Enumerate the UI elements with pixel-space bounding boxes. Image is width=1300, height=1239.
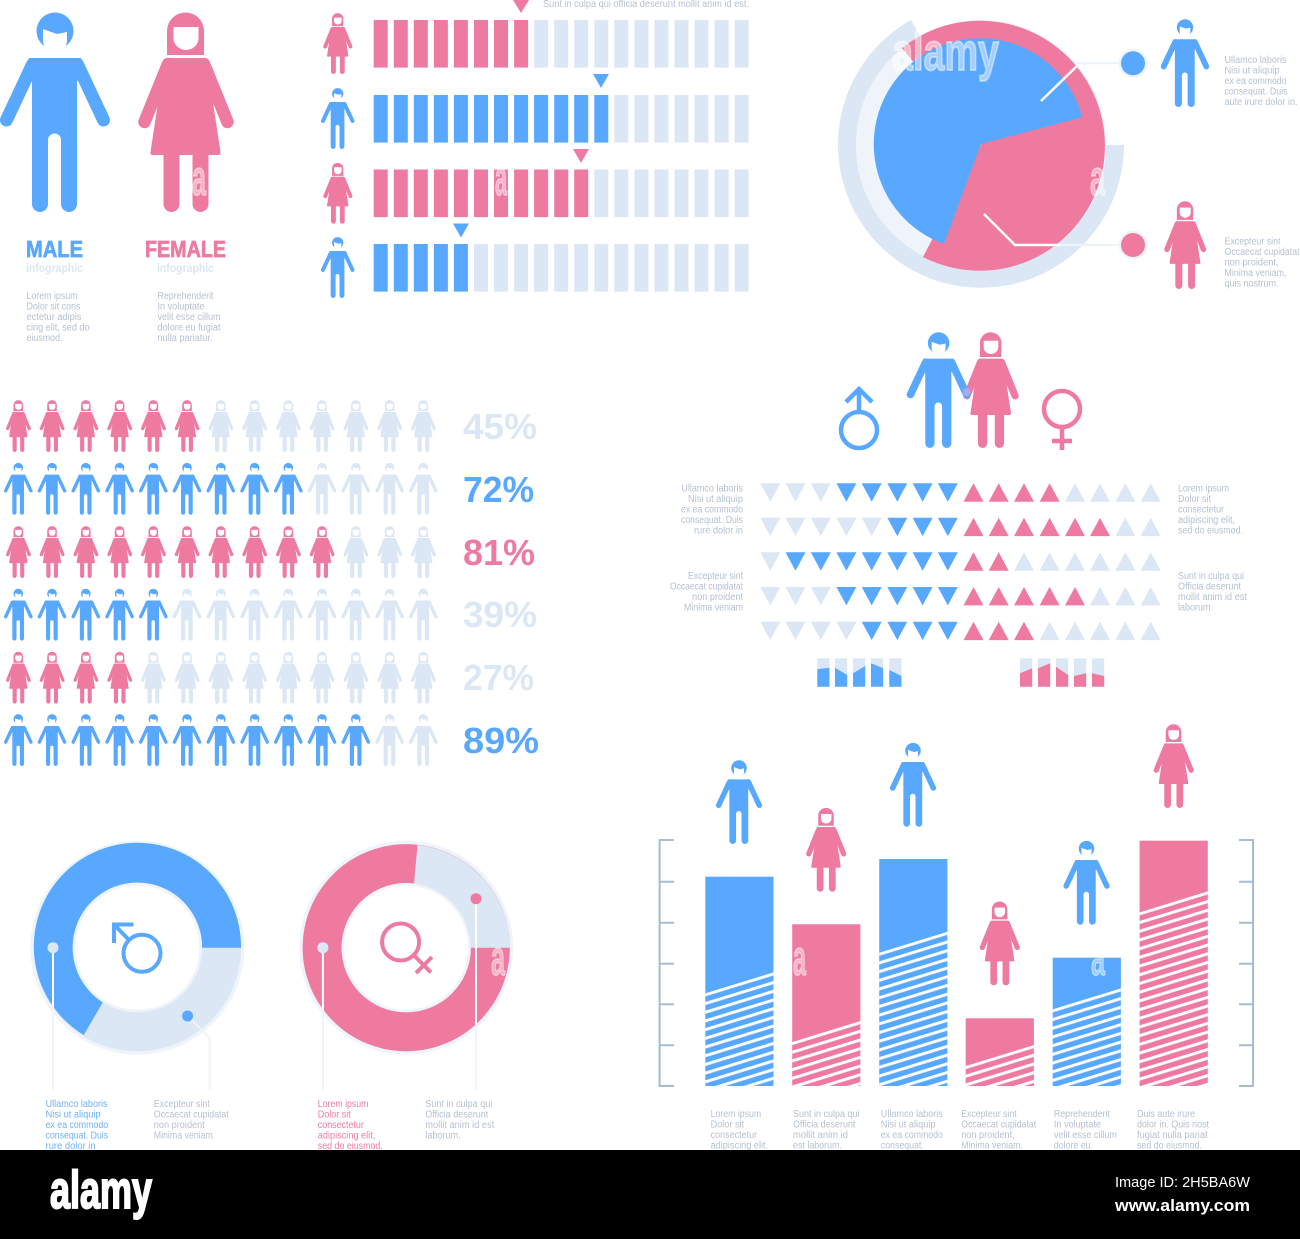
caption bar 2: Officia deserunt	[793, 1120, 856, 1130]
text block: grey legend	[154, 1099, 229, 1142]
bar 2 female	[792, 924, 860, 1086]
text block: pink legend	[318, 1099, 383, 1152]
footer logo: alamy	[50, 1161, 152, 1220]
leader line: left	[48, 942, 58, 1090]
pictogram row 89% male: 89%	[463, 720, 539, 761]
caption bar 1: adipiscing elit.	[711, 1140, 768, 1152]
text block: male description: eiusmod.	[26, 333, 62, 344]
text block: grey legend: Officia deserunt	[425, 1110, 488, 1120]
caption bar 5: velit esse cillum	[1054, 1130, 1117, 1141]
text block: left upper	[681, 484, 743, 536]
caption bar 3: ex ea commodo	[881, 1130, 943, 1141]
text block: left upper: Nisi ut aliquip	[688, 494, 743, 505]
panel: male and female title	[6, 12, 228, 344]
text block: male description: Dolor sit cons	[26, 302, 80, 312]
pictogram row 27% female: 27%	[463, 657, 534, 698]
watermark letters	[192, 150, 1106, 986]
text block: right upper	[1178, 484, 1243, 536]
pink segment	[303, 844, 510, 1051]
text block: left upper: rure dolor in	[694, 526, 743, 536]
bar row 2: male	[323, 74, 749, 149]
pink sector	[902, 21, 1105, 271]
mini bars: male	[817, 658, 902, 687]
icon: figure over bar 2	[809, 808, 844, 888]
text block: blue legend: Ullamco laboris	[46, 1099, 108, 1110]
pictogram row 81% female	[8, 526, 535, 576]
caption bar 4: non proident,	[961, 1130, 1015, 1141]
watermark: alamy	[892, 23, 999, 82]
leader line: left	[317, 942, 328, 1090]
text block: grey legend: Occaecat cupidatat	[154, 1110, 229, 1120]
text block: blue legend: ex ea commodo	[46, 1120, 108, 1131]
text block: left upper: Ullamco laboris	[681, 484, 743, 494]
text block: male description: cing elit, sed do	[26, 322, 90, 334]
caption bar 2	[793, 1109, 860, 1152]
text block: pink legend: adipiscing elit,	[318, 1130, 375, 1142]
icon: male symbol rotated	[114, 924, 160, 972]
right scale	[1239, 840, 1253, 1086]
caption bar 6: fugiat nulla pariat	[1137, 1130, 1208, 1141]
donut halo	[299, 841, 513, 1055]
text block: right upper: consectetur	[1178, 504, 1225, 516]
text block: right upper: sed do eiusmod.	[1178, 526, 1243, 536]
panel: male donut	[30, 841, 244, 1152]
triangle row 4	[760, 587, 1161, 605]
pictogram row 89% male	[6, 714, 539, 766]
text block: left lower: Occaecat cupidatat	[670, 582, 743, 592]
subheading: infographic female: infographic	[157, 261, 214, 275]
icon: large male figure	[6, 12, 104, 212]
triangle row 2	[760, 518, 1161, 536]
pictogram row 72% male: 72%	[463, 469, 534, 510]
bar 6 female	[1140, 841, 1208, 1086]
text block: right lower: Sunt in culpa qui	[1178, 571, 1244, 582]
bar row 3: female	[325, 149, 749, 221]
website: www.alamy.com	[1114, 1196, 1250, 1215]
pale inner ring	[856, 20, 1106, 270]
mini bars: female	[1020, 658, 1104, 687]
light segment	[414, 845, 510, 948]
marker dot: female	[1118, 230, 1148, 260]
text block: left lower: Minima veniam	[684, 602, 743, 614]
icon: male figure	[1164, 19, 1206, 107]
caption bar 3: Ullamco laboris	[881, 1109, 943, 1120]
text block: male description	[26, 291, 90, 344]
caption bar 2: Sunt in culpa qui	[793, 1109, 860, 1120]
donut halo	[30, 841, 244, 1055]
text block: grey legend	[425, 1099, 495, 1142]
icon: large female figure	[144, 12, 228, 204]
text block: right lower: laborum.	[1178, 602, 1213, 614]
text block: left upper: ex ea commodo	[681, 504, 743, 516]
icon: figure over bar 3	[893, 743, 933, 827]
text block: right upper: adipiscing elit,	[1178, 515, 1235, 526]
caption bar 4: Excepteur sint	[961, 1109, 1017, 1120]
bar row 1: female	[325, 0, 749, 72]
marker dot: male	[1118, 49, 1148, 78]
donut centre	[73, 883, 202, 1012]
caption bar 1: consectetur	[711, 1130, 758, 1141]
text block: pink legend: Dolor sit	[318, 1110, 351, 1120]
caption bar 1: Dolor sit	[711, 1120, 744, 1130]
text block: blue legend	[46, 1099, 108, 1152]
panel: couple and triangles	[670, 332, 1247, 687]
caption bar 2: est laborum.	[793, 1140, 842, 1152]
pictogram row 45% female: 45%	[463, 406, 537, 447]
caption bar 5: dolore eu.	[1054, 1140, 1093, 1152]
text block: female description: nulla pariatur.	[158, 333, 212, 344]
text block: grey legend: mollit anim id est	[425, 1120, 495, 1131]
text block: grey legend: laborum.	[425, 1130, 461, 1142]
icon: figure over bar 5	[1066, 841, 1107, 925]
icon: couple	[910, 332, 1015, 448]
text block: male legend	[1224, 55, 1298, 108]
text block: grey legend: Minima veniam	[154, 1130, 213, 1142]
watermark letters: a	[793, 930, 807, 986]
watermark letters: a	[1090, 150, 1106, 206]
text block: female legend: quis nostrum.	[1224, 278, 1278, 290]
triangle row 1	[760, 483, 1161, 502]
donut hole	[344, 886, 468, 1010]
text block: female legend: non proident,	[1224, 258, 1278, 268]
outer light ring	[838, 20, 1124, 288]
text block: blue legend: consequat. Duis	[46, 1130, 108, 1142]
text block: right upper: Dolor sit	[1178, 494, 1211, 505]
text block: right upper: Lorem ipsum	[1178, 484, 1229, 494]
text block: female description: Reprehenderit	[158, 291, 214, 302]
caption bar 6: Duis aute irure	[1137, 1109, 1195, 1120]
watermark letters: a	[192, 150, 207, 206]
text block: grey legend: non proident	[154, 1120, 205, 1131]
caption bar 6: dolor in. Quis nost	[1137, 1120, 1209, 1130]
icon: female figure	[1167, 201, 1203, 285]
bar 4 female	[966, 1018, 1034, 1086]
text block: female legend	[1224, 236, 1300, 290]
watermark letters: a	[1091, 930, 1106, 986]
text block: female description: velit esse cillum	[158, 312, 220, 323]
bar row 4: male	[323, 224, 749, 298]
connector: female	[984, 214, 1120, 245]
caption bar 4: Occaecat cupidatat	[961, 1120, 1036, 1130]
heading: MALE: MALE	[26, 236, 83, 262]
text block: pink legend: sed do eiusmod.	[318, 1141, 383, 1152]
text block: female description: In voluptate	[158, 302, 205, 312]
donut centre	[342, 883, 471, 1012]
caption bar 5: Reprehenderit	[1054, 1109, 1110, 1120]
pictogram row 81% female: 81%	[463, 532, 535, 573]
text block: pink legend: consectetur	[318, 1120, 364, 1131]
text block: female description: dolore eu fugiat	[158, 322, 221, 334]
subheading: infographic male: infographic	[26, 261, 83, 275]
pictogram row 27% female	[8, 652, 534, 702]
image id: Image ID: 2H5BA6W	[1115, 1174, 1251, 1191]
pictogram row 39% male	[6, 589, 537, 641]
footer bar	[0, 1150, 1300, 1239]
text block: female description	[158, 291, 221, 344]
text block: male legend: Nisi ut aliquip	[1224, 66, 1280, 76]
text block: female legend: Minima veniam,	[1224, 268, 1286, 279]
text block: left upper: consequat. Duis	[681, 515, 743, 526]
bar 3 male	[879, 859, 947, 1086]
caption bar 4: Minima veniam.	[961, 1140, 1023, 1152]
text block: left lower: Excepteur sint	[688, 571, 743, 582]
panel: pie chart	[838, 19, 1300, 289]
watermark letters: a	[495, 150, 508, 206]
bar 1 male	[705, 877, 774, 1086]
caption bar 6	[1137, 1109, 1209, 1152]
panel: pictogram percentages	[6, 400, 539, 766]
caption bar 1	[711, 1109, 768, 1152]
icon: figure over bar 6	[1156, 724, 1191, 805]
caption bar 5: In voluptate	[1054, 1120, 1101, 1130]
panel: segmented bars	[323, 0, 749, 298]
text block: right lower	[1178, 571, 1247, 614]
caption bar 6: sed do eiusmod.	[1137, 1140, 1202, 1152]
panel: female donut	[299, 841, 513, 1152]
caption bar 4	[961, 1109, 1036, 1152]
text block: left lower: non proident	[692, 592, 743, 603]
text block: male legend: ex ea commodo	[1224, 76, 1287, 87]
icon: male symbol	[841, 389, 877, 448]
pictogram row 39% male: 39%	[463, 594, 537, 635]
icon: female symbol	[1044, 391, 1080, 450]
text block: male legend: consequat. Duis	[1224, 86, 1288, 98]
panel: bar chart	[660, 724, 1253, 1152]
watermark letters: a	[491, 930, 506, 986]
caption bar 5	[1054, 1109, 1117, 1152]
leader line: right	[470, 893, 482, 1090]
donut hole	[75, 886, 199, 1010]
caption bar 3: Nisi ut aliquip	[881, 1120, 936, 1130]
left scale	[660, 840, 674, 1086]
leader line: right	[182, 1010, 210, 1090]
text block: male description: Lorem ipsum	[26, 291, 78, 302]
text block: pink legend: Lorem ipsum	[318, 1099, 368, 1110]
caption bar 3	[881, 1109, 943, 1152]
triangle row 3	[760, 552, 1161, 571]
text block: right lower: Officia deserunt	[1178, 582, 1241, 592]
heading: FEMALE: FEMALE	[145, 236, 226, 262]
blue segment	[34, 843, 241, 1035]
icon: figure over bar 1	[719, 760, 759, 844]
icon: female symbol rotated	[382, 924, 432, 973]
text block: grey legend: Excepteur sint	[154, 1099, 210, 1110]
text block: right lower: mollit anim id est	[1178, 592, 1247, 603]
text block: grey legend: Sunt in culpa qui	[425, 1099, 492, 1110]
text block: male legend: Ullamco laboris	[1224, 55, 1286, 66]
icon: figure over bar 4	[982, 902, 1017, 982]
caption bar 1: Lorem ipsum	[711, 1109, 761, 1120]
triangle row 5	[760, 622, 1161, 640]
light segment	[34, 844, 241, 1051]
caption bar 3: consequat.	[881, 1140, 924, 1152]
text block: blue legend: Nisi ut aliquip	[46, 1110, 101, 1120]
text block: left lower	[670, 571, 743, 614]
caption bar 2: mollit anim id	[793, 1130, 848, 1141]
connector: male	[1041, 63, 1120, 101]
pictogram row 45% female	[8, 400, 537, 450]
blue sector	[874, 38, 1082, 244]
text block: male description: ectetur adipis	[26, 312, 82, 323]
text block: female legend: Excepteur sint	[1224, 236, 1281, 248]
bar 5 male	[1053, 958, 1121, 1086]
pictogram row 72% male	[6, 463, 534, 515]
text block: blue legend: rure dolor in	[46, 1141, 96, 1152]
